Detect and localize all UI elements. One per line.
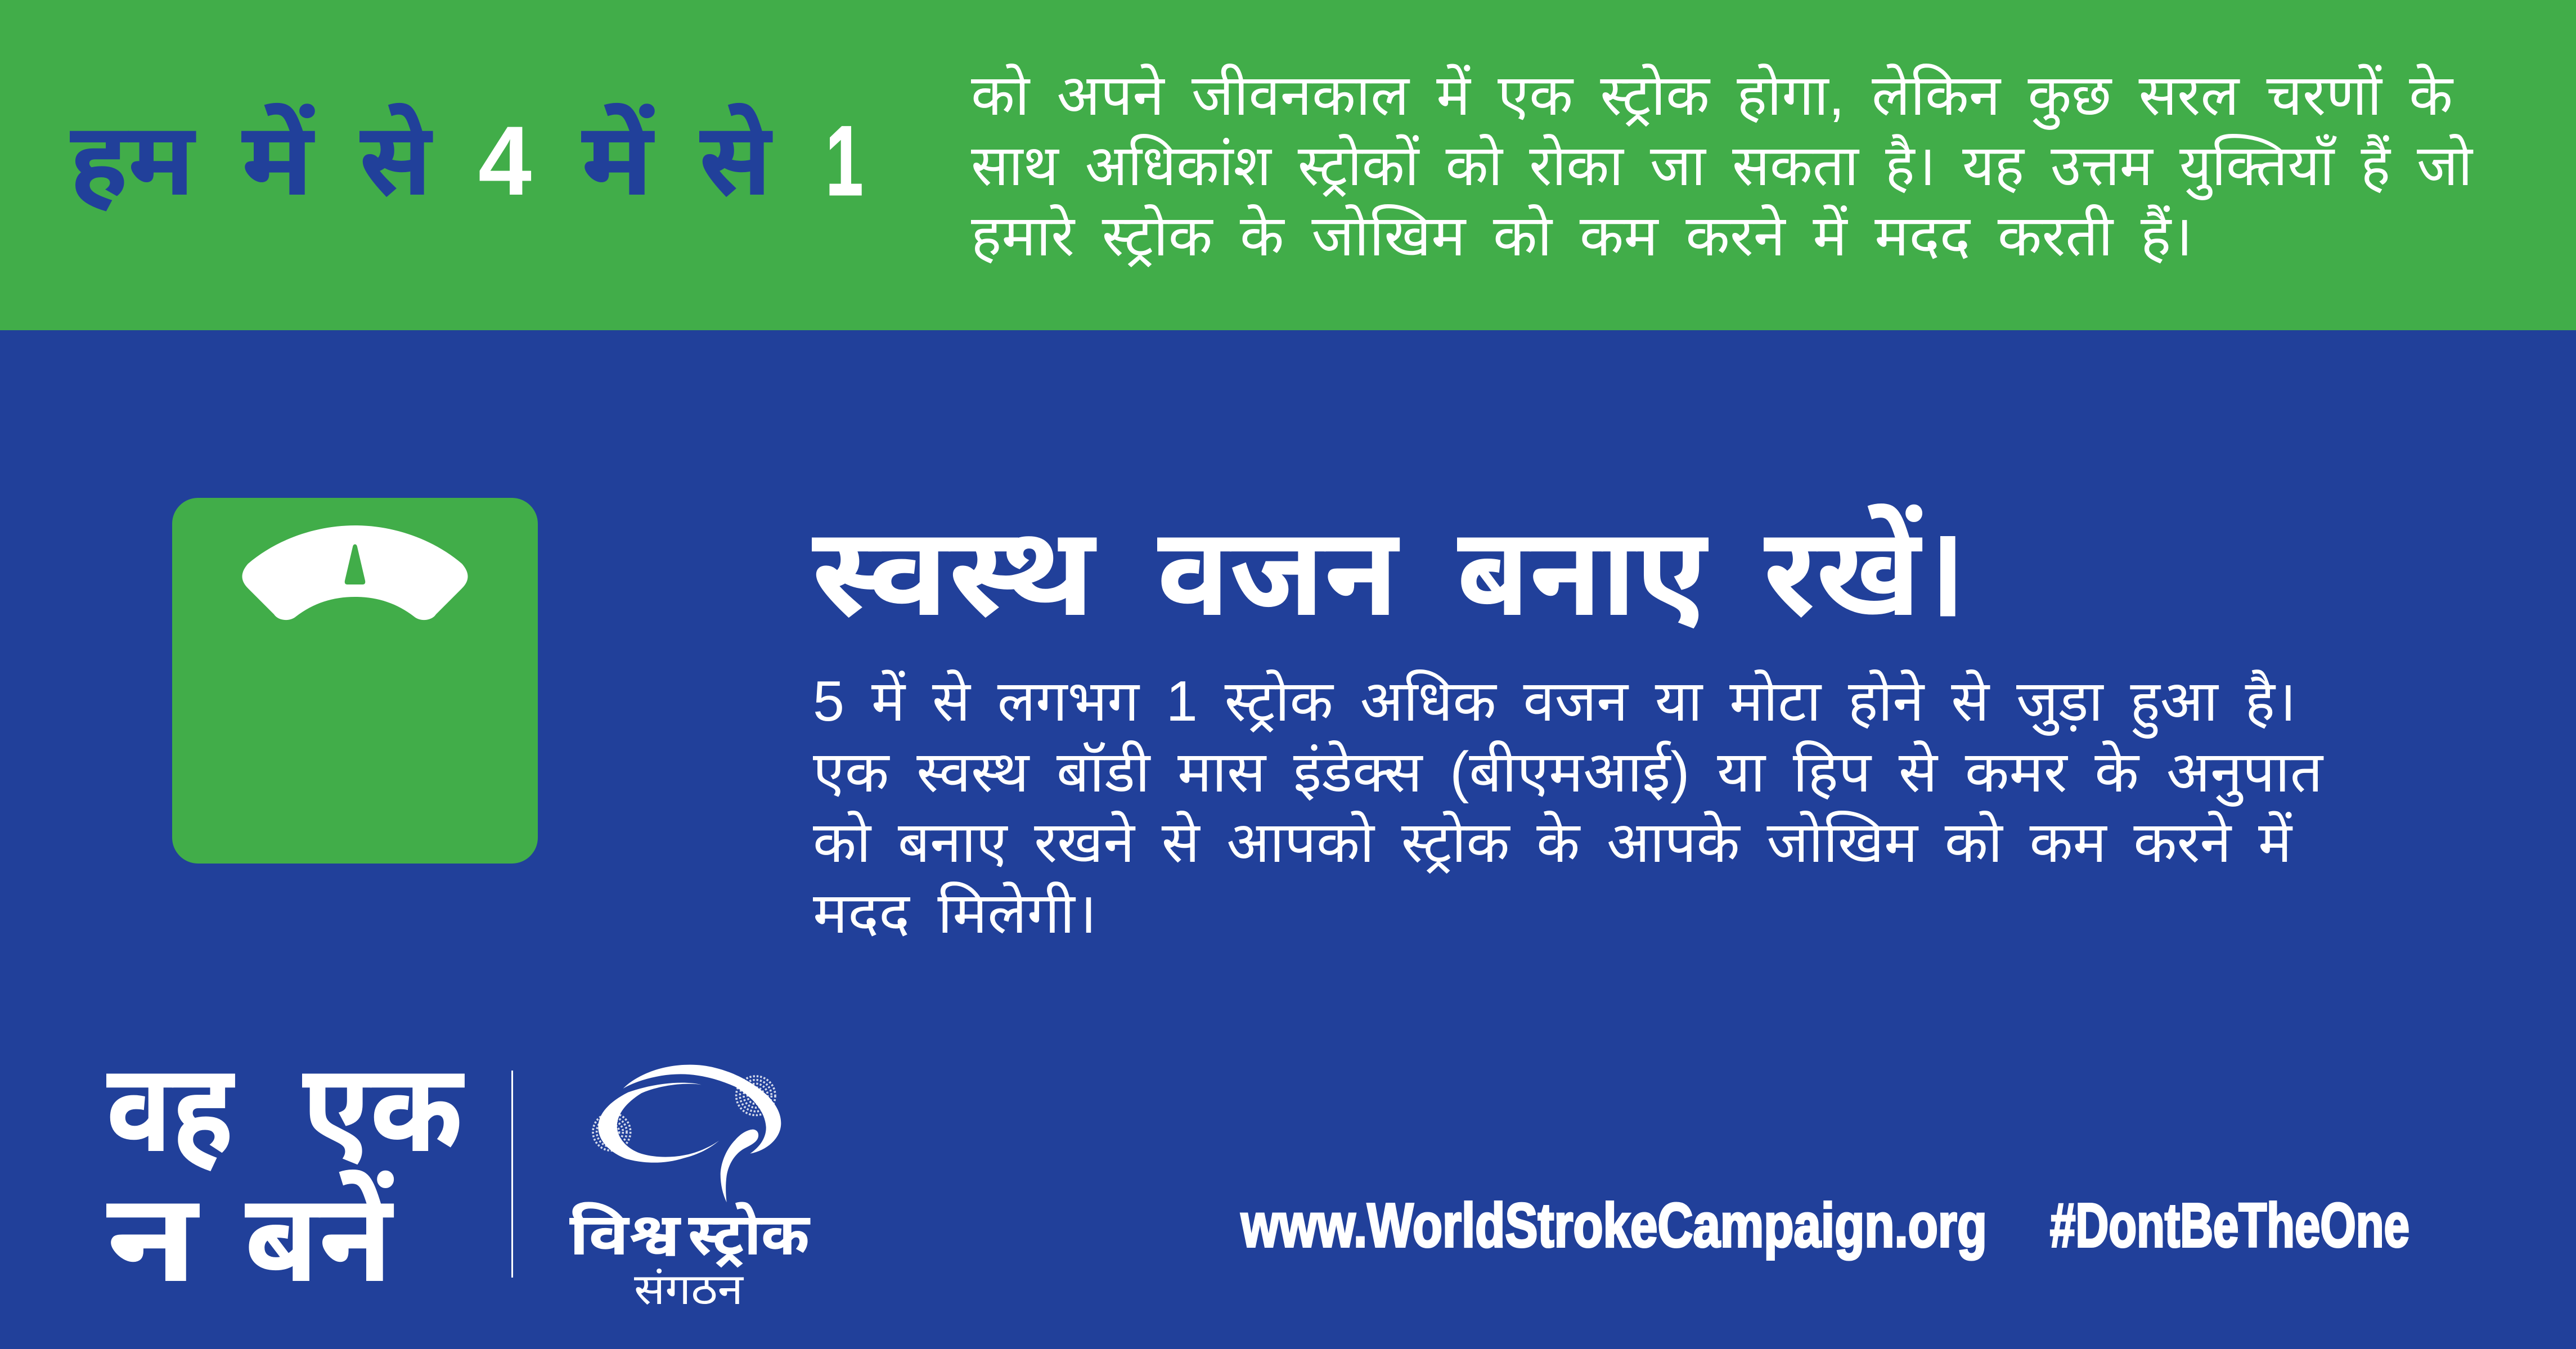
logo speckles: [593, 1076, 775, 1150]
main heading: वजन: [1157, 502, 1400, 641]
main heading: बनाए: [1457, 502, 1709, 641]
website url: www.WorldStrokeCampaign.org: [1240, 1191, 1987, 1260]
banner headline: 1 in 4 of us: हम: [70, 102, 196, 217]
banner headline: 1 in 4 of us: में: [581, 102, 655, 217]
slogan: don't be the one: एक: [302, 1038, 465, 1177]
main heading: स्वस्थ: [812, 502, 1097, 641]
main paragraph: [813, 669, 2323, 945]
slogan: don't be the one: बनें: [245, 1168, 394, 1307]
hashtag: #DontBeTheOne: [2050, 1191, 2409, 1260]
logo mark: swoosh head: [593, 1065, 781, 1202]
banner body text: को अपने जीवनकाल में एक स्ट्रोक होगा, लेकिन कुछ सरल चरणों के: [971, 63, 2454, 131]
main heading: [812, 502, 1962, 641]
slogan: don't be the one: न: [106, 1168, 200, 1307]
slogan: don't be the one: [106, 1038, 465, 1307]
main paragraph: 5 में से लगभग 1 स्ट्रोक अधिक वजन या मोटा होने से जुड़ा हुआ है।: [813, 669, 2296, 739]
main paragraph: को बनाए रखने से आपको स्ट्रोक के आपके जोखिम को कम करने में: [813, 810, 2293, 874]
icon: weighing scale: [172, 498, 538, 864]
logo wordmark: स्ट्रोक: [688, 1202, 811, 1268]
banner headline: 1 in 4 of us: 1: [826, 106, 863, 216]
banner headline: 1 in 4 of us: [70, 102, 863, 217]
logo wordmark: विश्व: [569, 1202, 682, 1267]
main heading: रखें: [1764, 502, 1923, 641]
panel: green top banner: [0, 0, 2576, 330]
main paragraph: मदद मिलेगी।: [813, 881, 1097, 945]
banner headline: 1 in 4 of us: से: [699, 102, 773, 217]
banner body text: साथ अधिकांश स्ट्रोकों को रोका जा सकता है। यह उत्तम युक्तियाँ हैं जो: [971, 134, 2474, 201]
banner headline: 1 in 4 of us: में: [241, 102, 316, 217]
banner body text: [971, 63, 2474, 268]
banner headline: 1 in 4 of us: 4: [478, 106, 532, 216]
divider: [511, 1071, 513, 1278]
banner body text: हमारे स्ट्रोक के जोखिम को कम करने में मदद करती हैं।: [971, 204, 2193, 268]
logo wordmark: [569, 1202, 811, 1268]
slogan: don't be the one: वह: [106, 1038, 235, 1177]
logo: World Stroke Organization: [569, 1065, 811, 1314]
banner headline: 1 in 4 of us: से: [359, 102, 433, 217]
main heading: ।: [1925, 502, 1962, 641]
logo subtitle: संगठन: [634, 1266, 744, 1314]
main paragraph: एक स्वस्थ बॉडी मास इंडेक्स (बीएमआई) या हिप से कमर के अनुपात: [813, 740, 2323, 807]
